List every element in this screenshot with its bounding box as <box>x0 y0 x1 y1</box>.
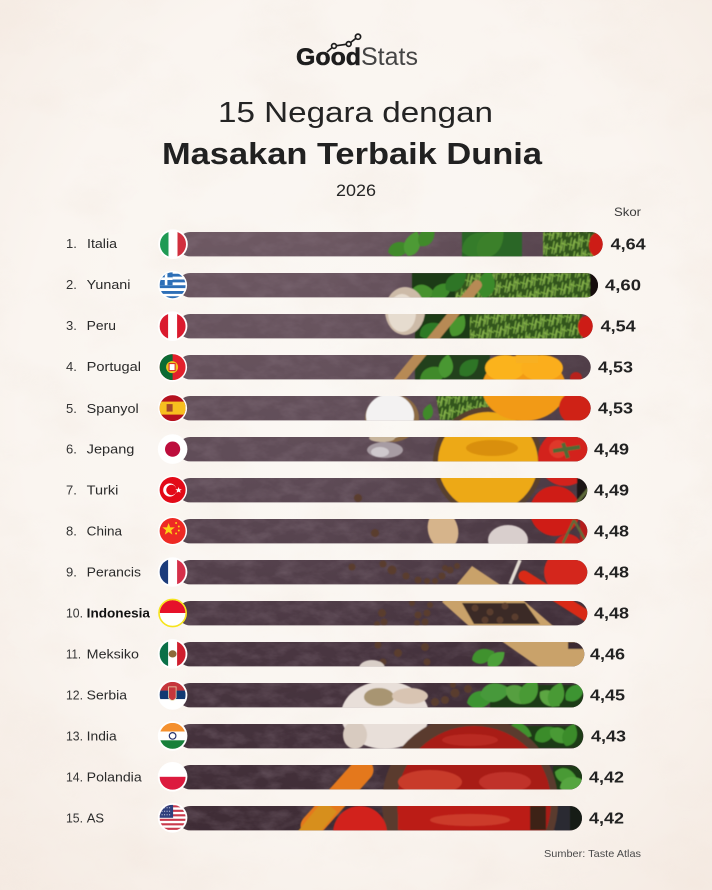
row 15: AS: 4,42 <box>589 810 624 828</box>
row 1: Italia <box>66 229 646 259</box>
row 3: Peru: 4,54 <box>601 318 636 336</box>
row 4: Portugal: Portugal <box>87 359 141 374</box>
row 11: Meksiko: 4,46 <box>590 646 625 664</box>
row 1: Italia: Italia <box>87 236 118 251</box>
row 7: Turki <box>66 476 629 504</box>
tomatoes middle <box>530 372 592 594</box>
row 11: Meksiko <box>66 639 625 669</box>
small tomato <box>332 806 388 830</box>
row 8: China: 4,48 <box>594 524 629 540</box>
row 13: India: 13. <box>66 728 83 744</box>
row 14: Polandia: 14. <box>66 770 83 784</box>
row 5: Spanyol <box>66 394 633 423</box>
row 9: Perancis <box>66 557 629 587</box>
row 2: Yunani: 4,60 <box>605 278 641 294</box>
row 8: China: 8. <box>66 524 77 538</box>
row 1: Italia: 1. <box>66 236 77 251</box>
flag: Jepang <box>158 434 187 464</box>
row 4: Portugal: 4. <box>66 359 77 374</box>
herbs top: parsley leaves <box>388 232 504 420</box>
flag: China <box>158 516 187 546</box>
flag: Portugal <box>158 353 187 382</box>
row 3: Peru <box>66 311 636 341</box>
flag: Spanyol <box>158 394 187 423</box>
row 12: Serbia <box>66 680 625 710</box>
row 11: Meksiko: 11. <box>66 646 81 662</box>
row 4: Portugal <box>66 353 633 382</box>
orange chili <box>312 770 362 826</box>
flag: AS <box>158 803 187 833</box>
row 2: Yunani: Yunani <box>87 277 131 292</box>
row 6: Jepang: Jepang <box>87 442 134 456</box>
row 13: India <box>66 721 626 751</box>
red chili <box>524 576 590 618</box>
row 9: Perancis: 9. <box>66 564 77 580</box>
row 10: Indonesia (highlighted): 10. <box>66 606 83 620</box>
herbs top: dill <box>412 232 605 420</box>
logo: GoodStats <box>296 34 418 71</box>
row 5: Spanyol: 4,53 <box>598 400 633 418</box>
row 7: Turki: 4,49 <box>594 482 629 500</box>
title line 1: 15 Negara dengan <box>218 97 493 129</box>
yellow bell pepper <box>482 355 566 421</box>
salt in scoop <box>365 394 419 458</box>
row 14: Polandia <box>66 762 624 792</box>
parsley lower <box>466 648 584 790</box>
row 14: Polandia: Polandia <box>87 770 143 784</box>
bar chart: photo strip bars <box>182 232 603 830</box>
row 1: Italia: 4,64 <box>611 236 646 254</box>
garlic cloves <box>427 519 529 584</box>
column header: Skor: Skor <box>614 205 641 219</box>
flag: Polandia <box>158 762 187 792</box>
row 2: Yunani: 2. <box>66 277 77 292</box>
row 6: Jepang: 4,49 <box>594 442 629 458</box>
row 12: Serbia: Serbia <box>87 688 128 702</box>
row 6: Jepang: 6. <box>66 442 77 456</box>
wooden spoon <box>398 285 477 382</box>
row 7: Turki: Turki <box>87 482 119 498</box>
row 5: Spanyol: 5. <box>66 401 77 416</box>
row 8: China: China <box>87 524 123 538</box>
flag: Meksiko <box>158 639 187 669</box>
peppercorns <box>348 494 518 706</box>
row 5: Spanyol: Spanyol <box>87 401 139 416</box>
flag: Turki <box>158 476 187 504</box>
row 2: Yunani <box>66 271 641 300</box>
tomato sauce bowl <box>382 724 572 830</box>
logo: GoodStats: Good <box>296 44 361 71</box>
row 10: Indonesia (highlighted): 4,48 <box>594 606 629 622</box>
row 11: Meksiko: Meksiko <box>87 646 139 662</box>
row 13: India: 4,43 <box>591 728 626 746</box>
wooden scoop <box>442 566 590 668</box>
flag: Serbia <box>158 680 187 710</box>
row 3: Peru: Peru <box>87 318 116 333</box>
flag: India <box>158 721 187 751</box>
row 15: AS: 15. <box>66 810 83 826</box>
turmeric bowl <box>432 406 541 502</box>
row 7: Turki: 7. <box>66 482 77 498</box>
title line 2: Masakan Terbaik Dunia <box>162 137 543 171</box>
row 9: Perancis: 4,48 <box>594 564 629 582</box>
flag: Perancis <box>158 557 187 587</box>
row 15: AS <box>66 803 624 833</box>
row 14: Polandia: 4,42 <box>589 770 624 786</box>
flag: Italia <box>158 229 188 259</box>
logo chart icon <box>327 34 361 52</box>
row 4: Portugal: 4,53 <box>598 360 633 376</box>
flag: Peru <box>158 311 187 341</box>
logo: GoodStats: Stats <box>361 43 418 71</box>
row 12: Serbia: 4,45 <box>590 688 625 704</box>
row 15: AS: AS <box>87 810 104 826</box>
row 10: Indonesia (highlighted) <box>66 599 629 627</box>
flag: Yunani <box>158 271 187 300</box>
row 3: Peru: 3. <box>66 318 77 333</box>
tomato bar ends <box>578 233 605 338</box>
flag: Indonesia <box>159 599 186 627</box>
row 13: India: India <box>87 728 118 744</box>
garlic clove <box>385 287 425 335</box>
row 10: Indonesia (highlighted): Indonesia <box>87 606 151 620</box>
row 9: Perancis: Perancis <box>87 564 142 580</box>
row 12: Serbia: 12. <box>66 688 83 702</box>
subtitle: year: 2026 <box>336 182 376 200</box>
garlic bulb <box>341 660 429 749</box>
row 6: Jepang <box>66 434 629 464</box>
row 8: China <box>66 516 629 546</box>
source note: Sumber: Taste Atlas <box>544 848 641 860</box>
